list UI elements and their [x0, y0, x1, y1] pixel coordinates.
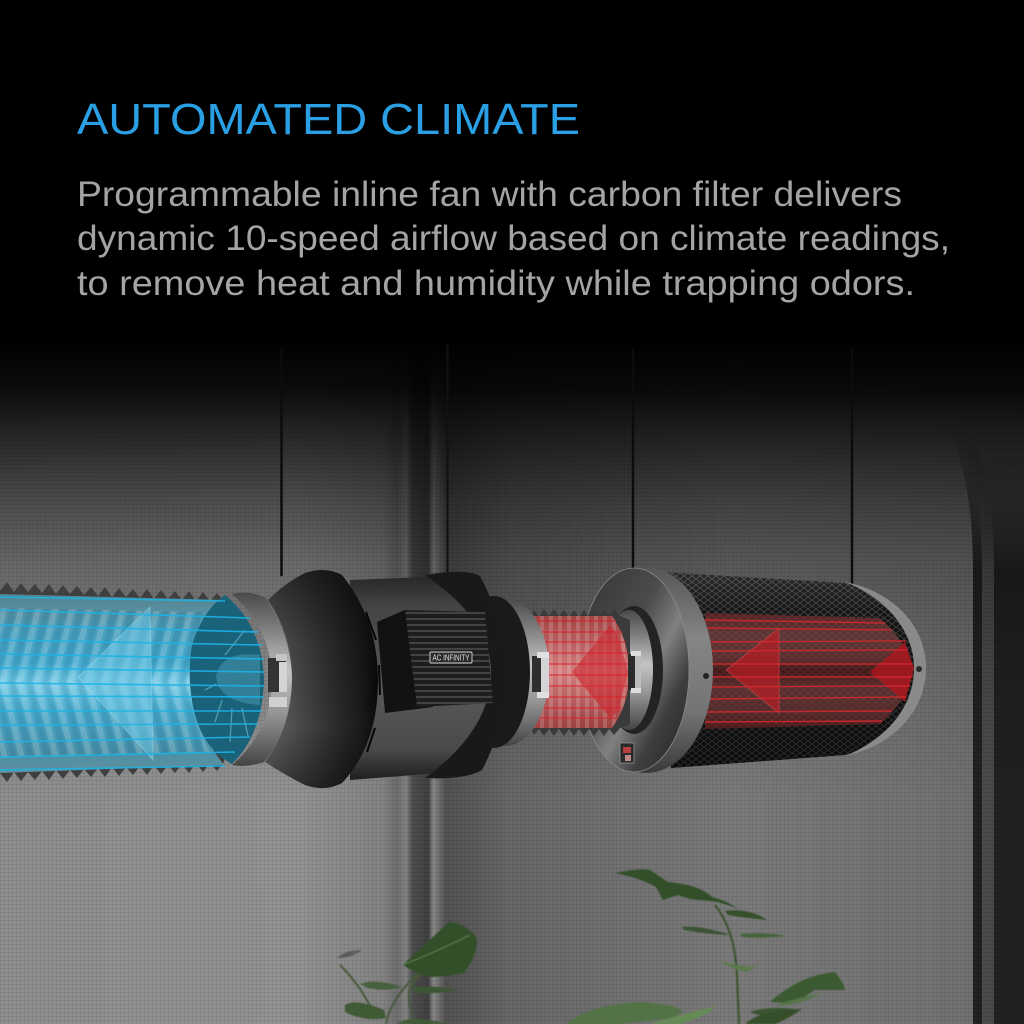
- plant: right: [566, 869, 845, 1024]
- controller ribbed heat sink: [405, 610, 493, 707]
- blue airflow lines: [0, 597, 264, 770]
- filter airflow lines: [705, 620, 913, 722]
- red duct airflow lines: [534, 621, 629, 718]
- flange slots: [366, 612, 380, 752]
- controller side: [377, 610, 433, 713]
- flange screw: [703, 673, 709, 679]
- inlet clamp: [268, 654, 287, 707]
- blue airflow arrow: [78, 607, 153, 760]
- red duct arrow: [572, 625, 628, 718]
- filter label badge: [620, 743, 634, 763]
- blue intake duct: [0, 582, 264, 782]
- fan blades: [205, 630, 248, 742]
- fan opening seen through duct: [190, 595, 264, 764]
- duct fold ribs upper: [0, 608, 205, 680]
- duct top teeth: [0, 582, 224, 612]
- brand label: AC INFINITY: [432, 654, 470, 662]
- description text: [77, 175, 950, 303]
- title: AUTOMATED CLIMATE: [77, 95, 580, 144]
- fan controller box: [377, 610, 493, 713]
- fan second flange: [425, 572, 506, 778]
- filter mesh body: [660, 572, 925, 768]
- inlet metal ring: [232, 593, 292, 766]
- right duct clamp: [628, 651, 641, 693]
- description text: to remove heat and humidity while trapping odors.: [77, 264, 915, 303]
- duct bottom teeth: [0, 750, 224, 782]
- duct fold ribs lower: [0, 680, 210, 758]
- fan outlet dark cone: [458, 596, 530, 748]
- carbon filter: [579, 567, 926, 773]
- small leaves left: [360, 982, 402, 990]
- filter end cap ring: [845, 582, 926, 756]
- description text: Programmable inline fan with carbon filter delivers: [77, 175, 902, 214]
- plant: left: [337, 922, 477, 1024]
- plant stem right: [715, 905, 739, 1024]
- outlet clamp: [532, 652, 549, 698]
- filter cap screw: [916, 666, 922, 672]
- plant stem left: [340, 965, 420, 1024]
- filter red airflow arrow: [726, 628, 779, 713]
- fan large flange and inlet cone: [265, 570, 378, 788]
- filter red arrow tail: [870, 642, 914, 702]
- side leaves: [725, 910, 767, 920]
- description text: dynamic 10-speed airflow based on climate readings,: [77, 219, 950, 258]
- fan hub: [216, 654, 260, 705]
- red duct section: [530, 609, 630, 736]
- red duct teeth: [530, 609, 630, 736]
- hanging cables: [282, 345, 852, 583]
- filter collar: [605, 606, 663, 734]
- fan body cylinder: [350, 575, 502, 780]
- tent zipper door edge: [948, 425, 1024, 1024]
- filter flange face: [579, 568, 689, 772]
- duct translucent body: [0, 594, 225, 773]
- tent zipper stripe: [958, 425, 994, 1024]
- red heat glow inside filter: [705, 613, 914, 729]
- red duct body: [534, 616, 629, 728]
- inline fan: [232, 570, 549, 788]
- tent frame pole: [385, 340, 447, 1024]
- large leaf: [403, 922, 477, 977]
- top leaf: [615, 869, 737, 908]
- filter flange outer band: [579, 567, 713, 773]
- fan outlet ring: [461, 598, 549, 746]
